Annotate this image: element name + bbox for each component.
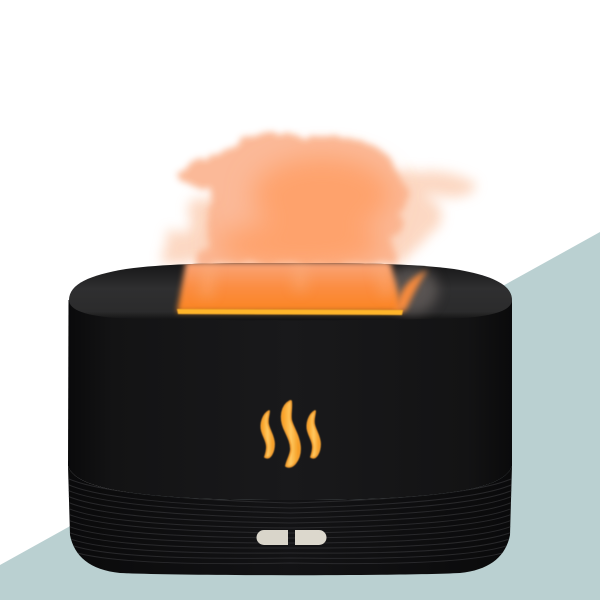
flame slot light <box>177 309 403 315</box>
mist cloud <box>156 135 476 269</box>
button: right <box>295 530 327 545</box>
flame glow <box>177 262 438 314</box>
background: teal diagonal band <box>0 232 600 600</box>
control buttons <box>256 530 327 545</box>
diffuser top surface <box>69 262 512 320</box>
diffuser body <box>68 300 512 500</box>
button: left <box>256 530 288 545</box>
diffuser base: ribbed lower band <box>60 466 520 575</box>
icon: three steam waves <box>261 401 320 467</box>
product illustration: flame diffuser <box>0 128 600 600</box>
